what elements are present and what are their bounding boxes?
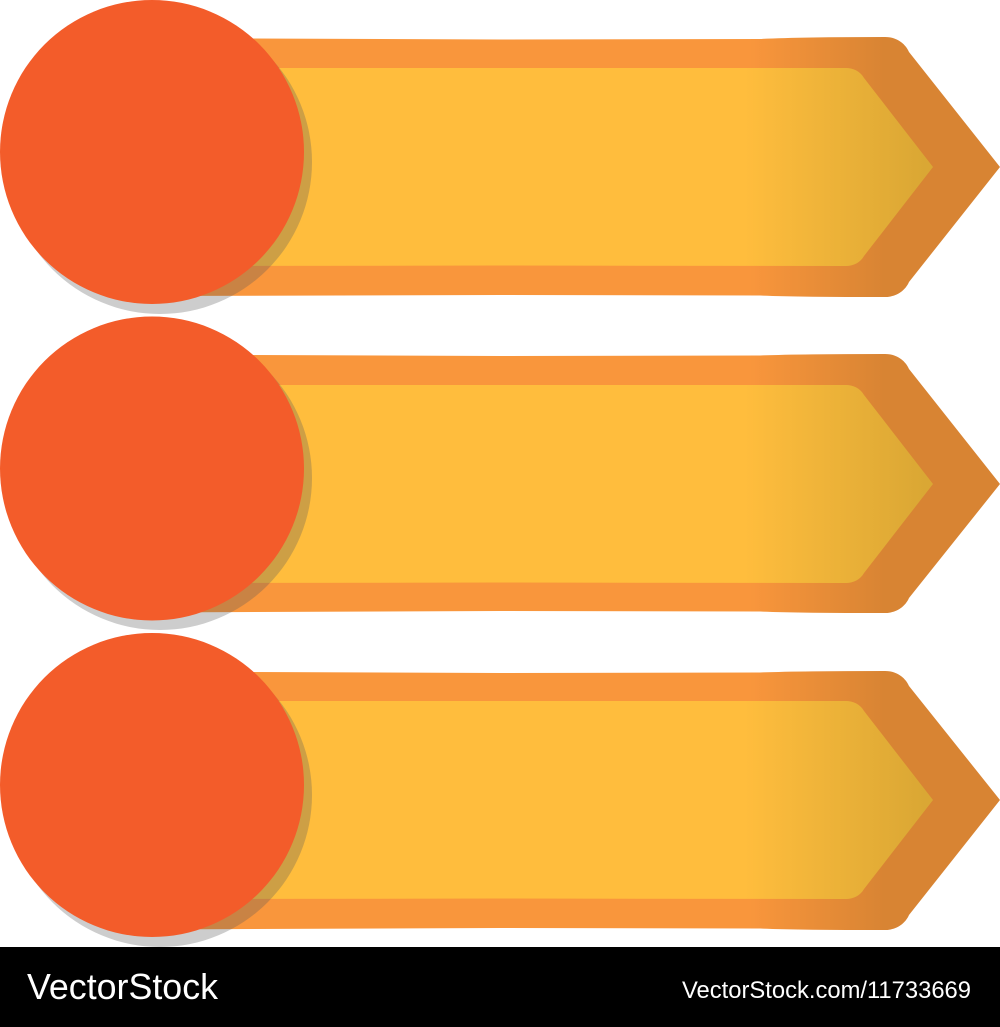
circle 2 shadow: [8, 326, 312, 630]
arrow 1 inner panel: [200, 68, 933, 266]
circle 1: [0, 0, 304, 304]
watermark logo text: VectorStock: [27, 966, 219, 1007]
arrow 2 inner panel: [200, 385, 933, 583]
circle 2: [0, 316, 304, 620]
arrow 2 outer band: [150, 354, 1000, 613]
circle 3 shadow: [8, 643, 312, 947]
circle 1 shadow: [8, 10, 312, 314]
arrow 3 inner panel: [200, 701, 933, 899]
watermark url text: VectorStock.com/11733669: [682, 977, 971, 1004]
circle 3: [0, 633, 304, 937]
arrow 1 outer band: [150, 37, 1000, 297]
arrow 3 outer band: [150, 671, 1000, 930]
watermark footer bar: [0, 947, 1000, 1027]
banner row 3: [0, 633, 1000, 947]
banner row 1: [0, 0, 1000, 314]
banner row 2: [0, 316, 1000, 630]
